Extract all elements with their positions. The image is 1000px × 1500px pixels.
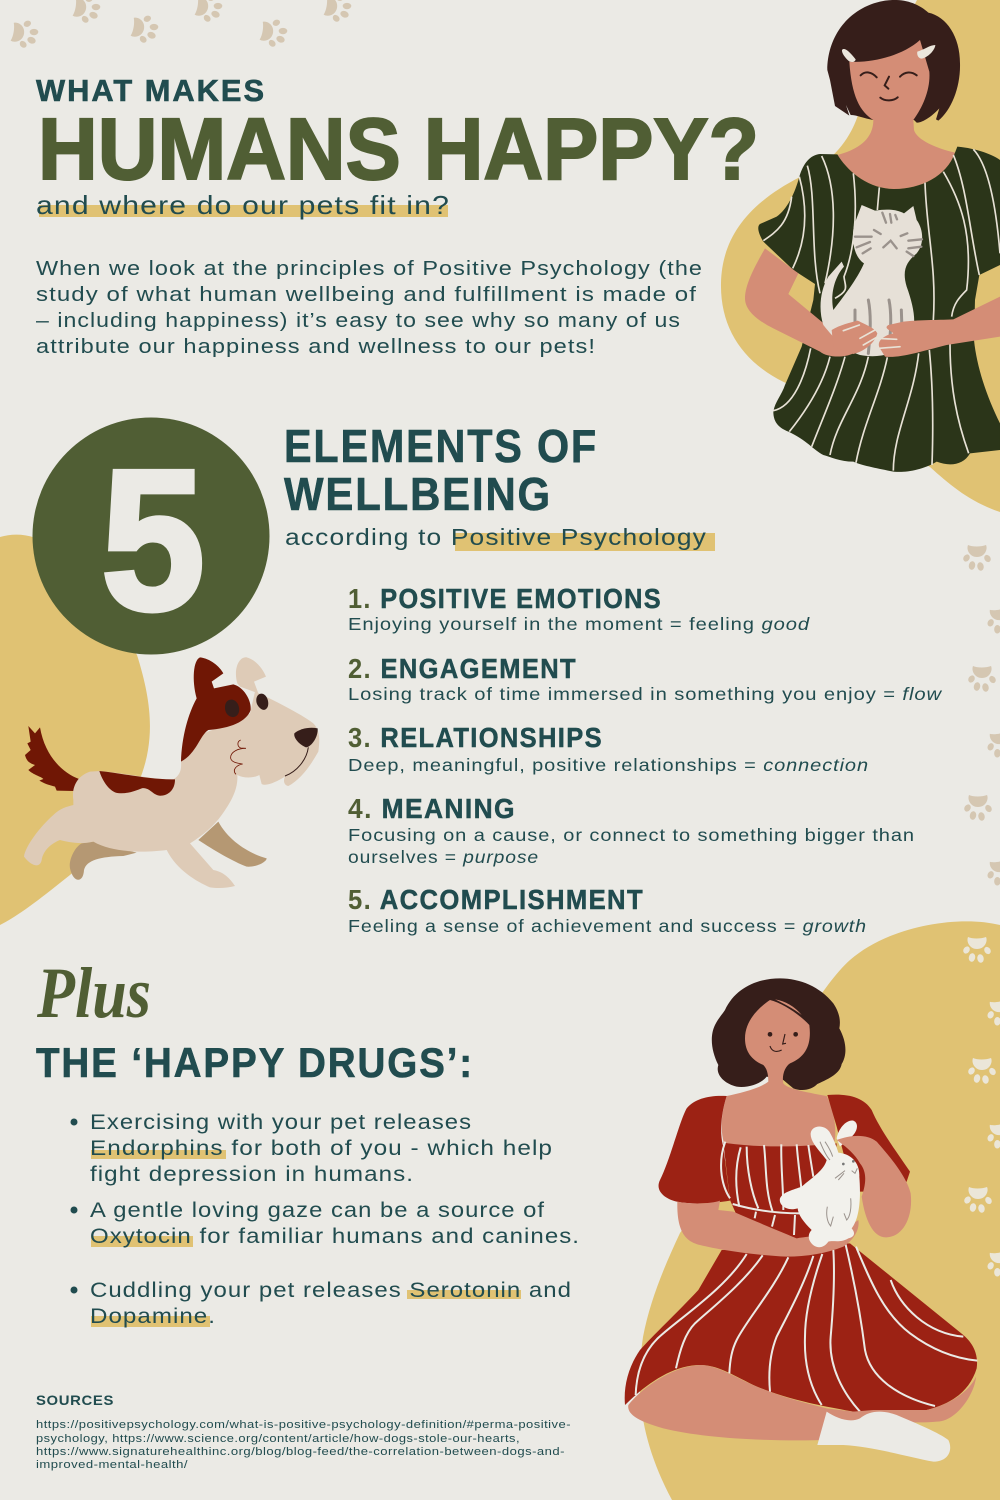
right sleeve	[827, 1095, 910, 1192]
paw prints: on yellow blob	[962, 937, 1000, 1280]
blob: bottom right	[640, 921, 1000, 1500]
bodice	[723, 1143, 837, 1253]
intro paragraph: – including happiness) it’s easy to see why so many of us	[36, 310, 681, 332]
hair	[827, 0, 960, 123]
sources heading: SOURCES	[36, 1392, 114, 1408]
rabbit far ear	[837, 1121, 857, 1147]
dress stripes	[763, 149, 1000, 471]
skirt	[625, 1243, 977, 1413]
bullet 1: fight depression in humans.	[90, 1163, 414, 1186]
skirt stripes	[636, 1243, 977, 1412]
bodice stripes	[721, 1142, 813, 1235]
rabbit	[780, 1126, 860, 1247]
hair strand	[775, 999, 802, 1015]
element 3: Deep, meaningful, positive relationships = connection	[348, 755, 869, 775]
sources text: psychology, https://www.science.org/content/article/how-dogs-stole-our-hearts,	[36, 1433, 520, 1445]
element 1: 1. POSITIVE EMOTIONS	[348, 583, 662, 614]
element 4: 4. MEANING	[348, 793, 516, 824]
tail	[25, 726, 79, 791]
bullet dots	[70, 1118, 78, 1294]
element 5: Feeling a sense of achievement and success = growth	[348, 916, 867, 936]
left sleeve	[659, 1096, 730, 1204]
hair clips	[842, 45, 935, 62]
eyes	[225, 694, 268, 717]
bullet 1: Endorphins for both of you - which help	[90, 1137, 553, 1160]
element 4: ourselves = purpose	[348, 847, 539, 867]
element 4: Focusing on a cause, or connect to something bigger than	[348, 825, 915, 845]
back legs	[70, 822, 267, 880]
sources	[36, 1392, 571, 1471]
subtitle: and where do our pets fit in?	[36, 190, 450, 220]
element 5	[348, 884, 867, 936]
blob: top right	[721, 0, 1000, 512]
hand over rabbit	[837, 1136, 911, 1237]
hands and right arm	[832, 297, 1000, 357]
facial features	[861, 72, 917, 100]
dress	[758, 147, 1000, 472]
element 2: Losing track of time immersed in something you enjoy = flow	[348, 684, 943, 704]
subtitle highlight	[39, 205, 448, 217]
bullet 3	[90, 1279, 572, 1328]
bullet 2: Oxytocin for familiar humans and canines.	[90, 1225, 580, 1248]
sources text: https://positivepsychology.com/what-is-positive-psychology-definition/#perma-positive-	[36, 1419, 571, 1431]
numeral 5: 5	[101, 429, 205, 652]
cat	[821, 205, 922, 356]
intro paragraph	[36, 258, 703, 358]
happy drugs heading: THE ‘HAPPY DRUGS’:	[36, 1039, 474, 1086]
illustration: woman with rabbit	[625, 978, 977, 1462]
section heading: elements of wellbeing	[284, 420, 715, 551]
bullet 3: Cuddling your pet releases Serotonin and	[90, 1279, 572, 1302]
word highlights	[91, 1150, 521, 1327]
blob: left behind dog	[0, 535, 150, 925]
facial features	[768, 1032, 798, 1051]
face, neck and chest	[837, 40, 955, 189]
sources text	[36, 1419, 571, 1471]
intro paragraph: attribute our happiness and wellness to our pets!	[36, 336, 596, 358]
elements list	[348, 583, 943, 936]
element 3: 3. RELATIONSHIPS	[348, 722, 603, 753]
element 3	[348, 722, 869, 775]
bullet 2	[90, 1199, 580, 1248]
element 1: Enjoying yourself in the moment = feeling good	[348, 614, 811, 634]
happy drugs list	[70, 1111, 580, 1328]
forearm holding rabbit	[677, 1201, 859, 1257]
paw prints: top	[10, 0, 354, 51]
mouth and cheek lines	[285, 747, 308, 776]
nose	[294, 728, 318, 747]
face, neck and chest	[722, 1000, 835, 1151]
sources text: improved-mental-health/	[36, 1459, 189, 1471]
circle	[32, 418, 270, 654]
body and head	[24, 692, 319, 888]
element 2: 2. ENGAGEMENT	[348, 653, 577, 684]
paw prints: right side	[962, 545, 1000, 889]
right ear	[236, 657, 266, 693]
bullet 2: A gentle loving gaze can be a source of	[90, 1199, 545, 1222]
title: what makes: WHAT MAKES	[36, 73, 266, 108]
intro paragraph: When we look at the principles of Positive Psychology (the	[36, 258, 703, 280]
element 5: 5. ACCOMPLISHMENT	[348, 884, 644, 915]
hair	[712, 978, 845, 1090]
sources text: https://www.signaturehealthinc.org/blog/blog-feed/the-correlation-between-dogs-and-	[36, 1446, 565, 1458]
heading highlight	[455, 533, 715, 551]
illustration: running dog	[24, 657, 319, 888]
element 4	[348, 793, 915, 867]
element 1	[348, 583, 811, 634]
bullet 1	[90, 1111, 553, 1186]
sock	[817, 1412, 950, 1462]
bullet 3: Dopamine.	[90, 1305, 216, 1328]
intro paragraph: study of what human wellbeing and fulfillment is made of	[36, 284, 697, 306]
legs	[628, 1365, 976, 1440]
title: humans happy: HUMANS HAPPY?	[38, 101, 759, 198]
head patch and left ear	[181, 657, 251, 762]
heading subline: according to Positive Psychology	[285, 524, 707, 550]
arms	[745, 248, 877, 357]
number badge	[32, 418, 270, 654]
heading line 2: WELLBEING	[284, 468, 552, 520]
title block	[36, 73, 759, 220]
plus heading: Plus	[36, 953, 151, 1033]
finger highlights	[843, 325, 900, 348]
back patch	[99, 771, 175, 796]
illustration: woman with cat	[745, 0, 1000, 472]
heading line 1: ELEMENTS OF	[284, 420, 598, 472]
element 2	[348, 653, 943, 704]
bullet 1: Exercising with your pet releases	[90, 1111, 472, 1134]
